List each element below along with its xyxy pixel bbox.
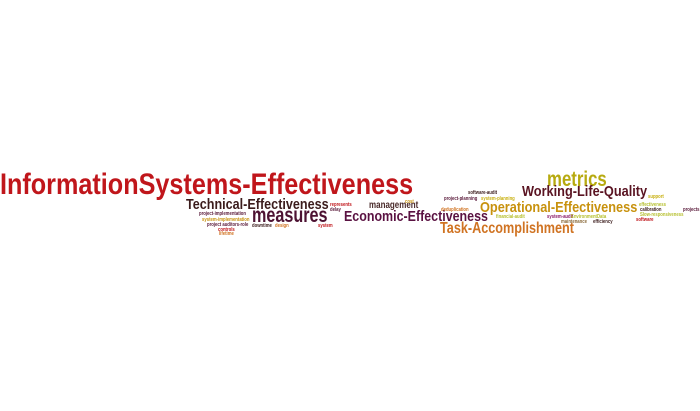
word: Task-Accomplishment: Task-Accomplishment xyxy=(440,220,574,237)
word: EnvironmentData: EnvironmentData xyxy=(571,214,606,220)
word: system-planning: system-planning xyxy=(481,196,515,202)
word: system-implementation: system-implementation xyxy=(202,217,249,223)
word: system-audit: system-audit xyxy=(547,214,573,220)
word: Operational-Effectiveness: Operational-Effectiveness xyxy=(480,199,637,216)
word: controls: controls xyxy=(218,227,235,233)
word: software-audit: software-audit xyxy=(468,190,497,196)
word: downtime: downtime xyxy=(252,223,272,229)
word: project-implementation: project-implementation xyxy=(199,211,246,217)
word: efficiency: efficiency xyxy=(593,219,613,225)
word: projects: projects xyxy=(683,207,700,213)
word: project-planning: project-planning xyxy=(444,196,477,202)
word: system: system xyxy=(318,223,333,229)
word: software: software xyxy=(636,217,653,223)
word: cost: cost xyxy=(405,199,414,205)
word: support: support xyxy=(648,194,664,200)
word: Technical-Effectiveness: Technical-Effectiveness xyxy=(186,196,329,213)
word: metrics: metrics xyxy=(547,168,607,191)
word: Working-Life-Quality: Working-Life-Quality xyxy=(522,183,647,200)
word: calibration: calibration xyxy=(640,207,662,213)
word: measures: measures xyxy=(252,204,328,227)
word: maintenance: maintenance xyxy=(561,219,587,225)
word: InformationSystems-Effectiveness: InformationSystems-Effectiveness xyxy=(0,168,413,201)
word: represents: represents xyxy=(330,202,352,208)
word: lifetime: lifetime xyxy=(219,231,234,237)
word: management: management xyxy=(369,200,418,211)
word: design: design xyxy=(275,223,289,229)
word: effectiveness: effectiveness xyxy=(639,202,666,208)
word: Slow-responsiveness: Slow-responsiveness xyxy=(640,212,683,218)
word: delay: delay xyxy=(330,207,341,213)
word: project auditors-role: project auditors-role xyxy=(207,222,248,228)
word: financial-audit: financial-audit xyxy=(496,214,525,220)
word: deduplication: deduplication xyxy=(441,207,469,213)
word: Economic-Effectiveness: Economic-Effectiveness xyxy=(344,208,488,225)
